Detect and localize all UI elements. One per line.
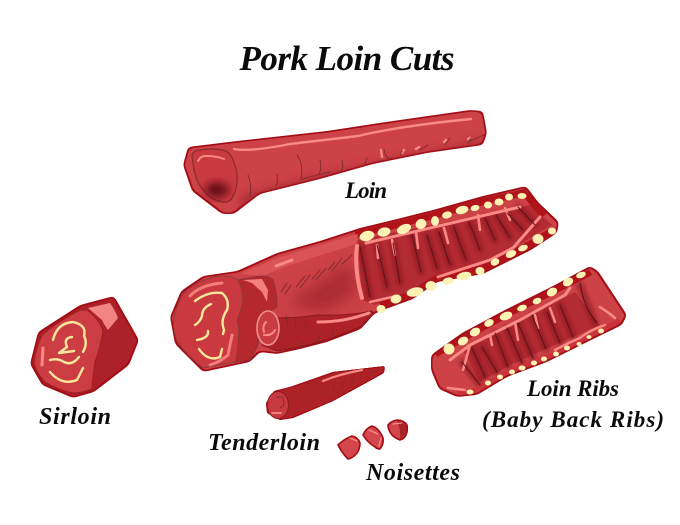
rib fat deposits [358, 193, 556, 313]
label: loin ribs: (Baby Back Ribs) [482, 407, 664, 432]
infographic [30, 46, 663, 480]
cut: tenderloin [266, 366, 385, 420]
cut face of the loin [192, 149, 237, 202]
title: Pork Loin Cuts [238, 39, 454, 78]
cut: noisettes [338, 420, 407, 459]
cut: whole loin with ribs [170, 186, 559, 372]
middle section of the loin [235, 276, 279, 362]
label: tenderloin: Tenderloin [208, 430, 320, 456]
label: loin: Loin [344, 178, 387, 203]
fat striations on the loin [281, 255, 352, 294]
rib bones [462, 283, 597, 385]
label: sirloin: Sirloin [39, 404, 111, 430]
noisette 2 [363, 426, 383, 449]
loin muscle highlights [240, 234, 358, 276]
rib fat deposits [444, 270, 604, 394]
rib rack shading [358, 205, 552, 305]
tenderloin muscle on the whole loin [262, 311, 373, 351]
edge bands [355, 191, 555, 307]
cut: loin [183, 110, 490, 215]
noisette 3 [388, 420, 407, 440]
rib bones [360, 207, 535, 297]
label: noisettes: Noisettes [365, 460, 460, 486]
noisette 1 [338, 436, 360, 459]
cut: sirloin [30, 296, 139, 398]
marbled cut face [174, 276, 243, 368]
cut: loin ribs [431, 266, 627, 397]
tenderloin cut face [268, 392, 288, 418]
label: loin ribs: Loin Ribs [526, 376, 619, 401]
